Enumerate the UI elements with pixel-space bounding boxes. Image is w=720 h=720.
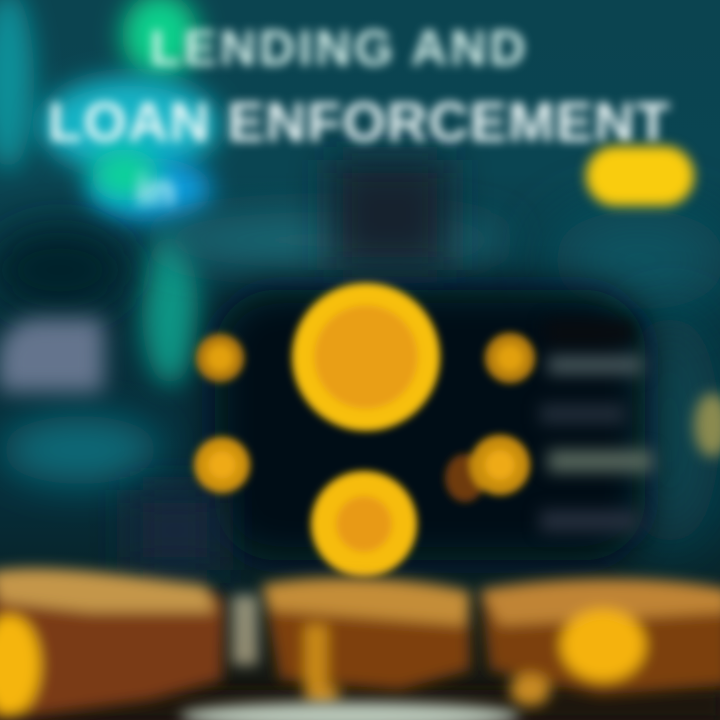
badge: yellow pill — [586, 146, 694, 206]
plate: pale base — [180, 702, 520, 720]
right stack — [480, 579, 720, 706]
side label: blurred grey block on left — [0, 318, 104, 392]
title: LENDING AND — [150, 20, 528, 76]
title — [44, 20, 676, 153]
centre stack — [262, 578, 470, 705]
list rows: right column text — [535, 316, 662, 537]
left stack — [0, 568, 225, 720]
small coin upper left — [196, 334, 244, 382]
right edge coin — [694, 393, 720, 457]
bottom coin — [311, 471, 417, 577]
large center coin — [292, 283, 440, 431]
small coin lower right — [445, 435, 530, 502]
small coin upper right — [485, 333, 535, 383]
title: LOAN ENFORCEMENT — [48, 90, 671, 153]
small coin lower left — [194, 437, 250, 493]
subtitle: small glyph under title: in — [136, 166, 175, 215]
